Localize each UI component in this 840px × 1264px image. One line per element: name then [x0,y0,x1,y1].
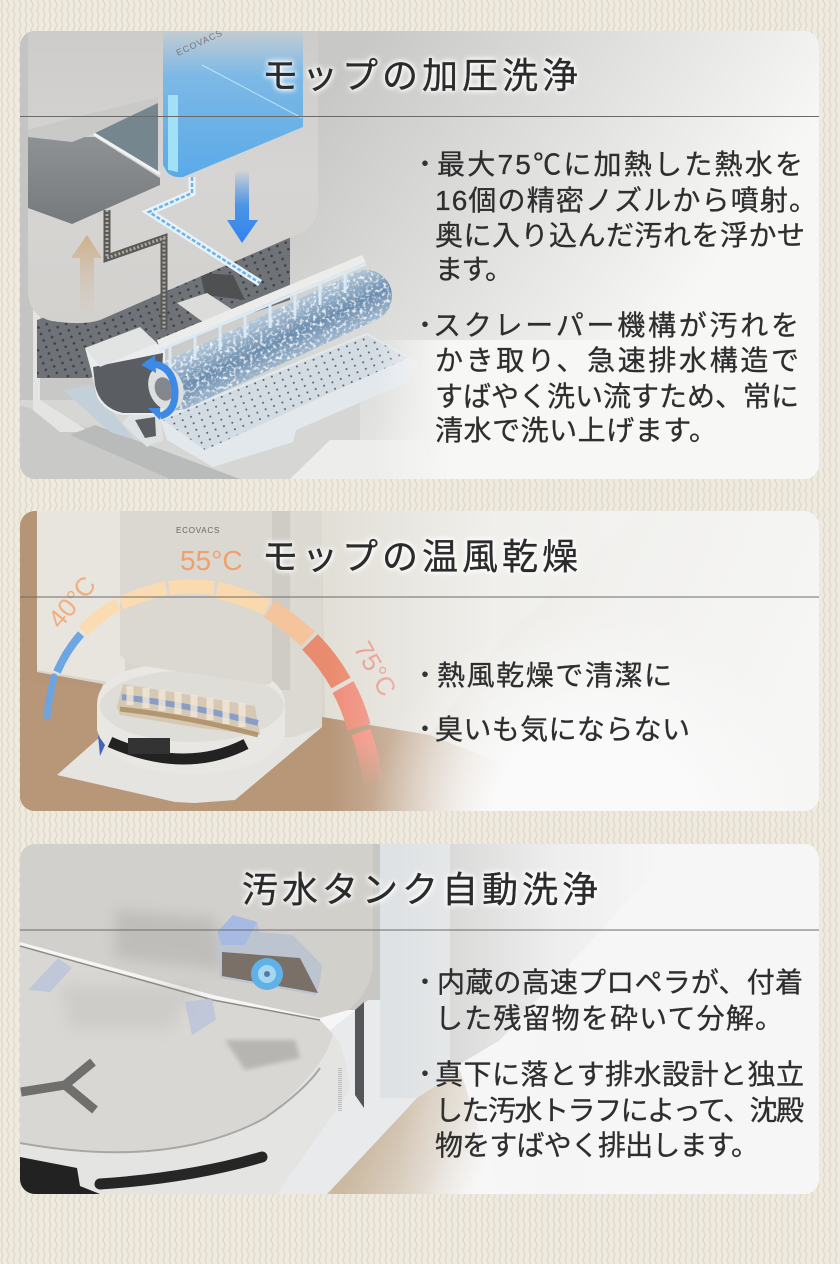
clean water pipe [149,177,260,283]
dirty water pipe [107,210,164,330]
station tower [120,511,272,684]
robot top disc [20,946,333,1152]
text block: scraper mechanism: ・ [412,310,438,340]
clean water tank [163,31,303,177]
text block: drain design: した汚水トラフによって、沈殿 [435,1095,804,1126]
blue rotation arrows [146,364,175,416]
base plate [57,727,322,803]
ghosted internals [115,910,225,970]
panel: dirty water tank auto-clean [20,844,820,1194]
divider [20,929,819,931]
text block: hot water spray: 奥に入り込んだ汚れを浮かせ [435,220,805,251]
text block: propeller: した残留物を砕いて分解。 [435,1003,783,1034]
beige up arrow [71,235,102,303]
text block: scraper mechanism: かき取り、急速排水構造で [435,345,799,376]
text block: propeller: 内蔵の高速プロペラが、付着 [437,967,803,998]
75 degree label: 75°C [348,636,403,701]
robot side wall [20,1034,350,1194]
robot bumper [110,742,246,759]
translucent blue mop parts [28,958,216,1035]
text block: no odour: ・ [412,714,438,744]
text block: hot water spray: 最大75℃に加熱した熱水を [437,149,803,180]
mop tray [160,333,418,467]
perforated tray well [37,235,290,378]
text block: drain design: 真下に落とす排水設計と独立 [435,1059,804,1090]
text block: hot water spray: 16個の精密ノズルから噴射。 [435,185,817,216]
text block: scraper mechanism: 清水で洗い上げます。 [435,415,717,446]
text block: drain design: ・ [412,1059,438,1089]
text block: propeller [412,967,803,1034]
dirty water tank with propeller [217,915,322,995]
panel: warm air mop drying [20,511,820,811]
logo text: ECOVACS [176,526,220,535]
logo text: ECOVACS [175,27,224,58]
panel: mop pressurised washing [20,27,820,479]
heading: モップの加圧洗浄 [262,55,578,96]
tower body [28,31,318,323]
scraper bar and grille [157,255,366,349]
divider [20,596,819,598]
text block: hot air drying: 熱風乾燥で清潔に [437,660,672,691]
heading: 汚水タンク自動洗浄 [242,869,598,910]
text block: scraper mechanism: スクレーパー機構が汚れを [433,310,799,341]
blue down arrow [227,170,258,243]
text block: drain design [412,1059,804,1161]
heading: モップの温風乾燥 [262,536,578,577]
product image: robot and tank cutaway [20,844,820,1194]
text block: hot water spray: ます。 [435,254,513,285]
water-soaked mop roller [178,296,366,384]
robot body [97,666,285,737]
recessed dirty water tank [28,137,160,224]
text block: drain design: 物をすばやく排出します。 [435,1130,759,1161]
text block: hot water spray: ・ [412,149,438,179]
station fabric body [20,844,350,1018]
product image: robot docked with temperature arc [20,511,820,811]
text block: propeller: ・ [412,967,438,997]
text block: hot air drying: ・ [412,660,438,690]
text block: scraper mechanism [412,310,799,446]
divider [20,116,819,118]
Y-shaped top plate [21,1062,95,1110]
text block: scraper mechanism: すばやく洗い流すため、常に [435,381,799,412]
40 degree label: 40°C [42,570,102,634]
text block: hot water spray [412,149,817,285]
temperature arc [47,586,373,782]
product image: station with tanks and mop roller [20,27,820,479]
roller end cap [148,367,184,410]
robot black bumper [20,1157,100,1194]
text block: no odour: 臭いも気にならない [435,714,690,745]
mop roller in robot [117,684,260,735]
55 degree label: 55°C [180,545,243,576]
